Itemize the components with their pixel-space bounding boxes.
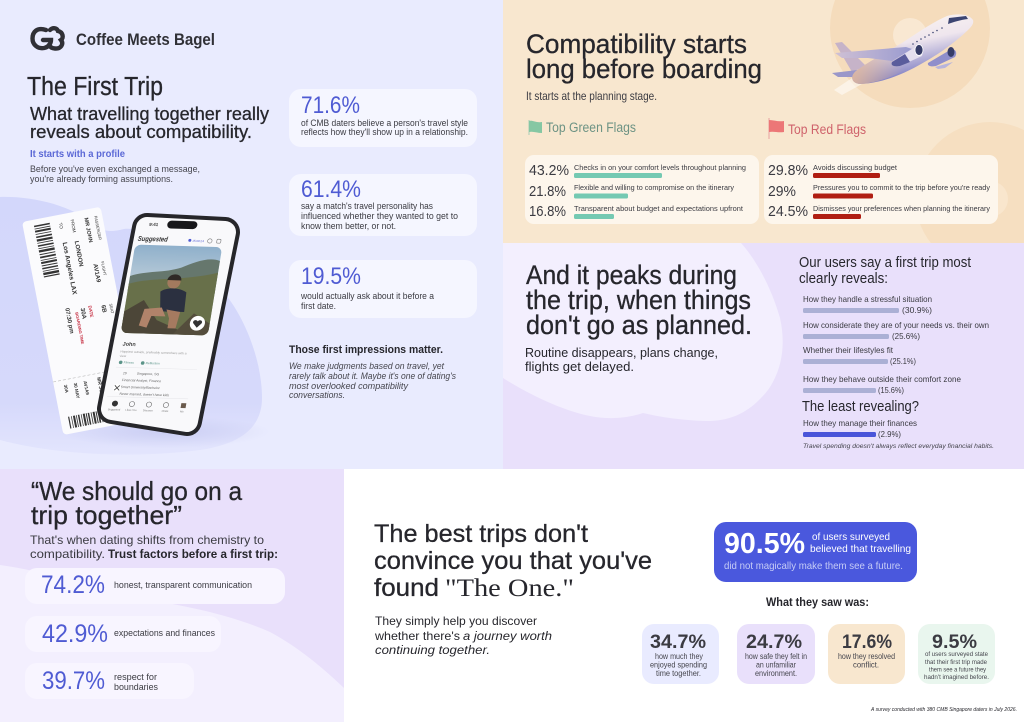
bar chart: what a first trip reveals: (25.1%) bbox=[890, 356, 916, 366]
text block: That's when dating shifts from chemistry to bbox=[30, 533, 264, 547]
icon: phone showing a dating profile bbox=[105, 220, 226, 421]
logo: Coffee Meets Bagel bbox=[32, 28, 215, 49]
icon: phone showing a dating profile: John bbox=[122, 342, 136, 348]
stat card: 34.7%: 34.7% bbox=[650, 632, 706, 653]
callout: 90.5%: believed that travelling bbox=[810, 543, 911, 555]
text block: Trust factors before a first trip: bbox=[108, 547, 278, 561]
stat card: 61.4%: say a match's travel personality has bbox=[301, 201, 433, 211]
stat card: 24.7%: an unfamiliar bbox=[756, 660, 796, 670]
logo: Coffee Meets Bagel: Coffee Meets Bagel bbox=[76, 30, 215, 49]
tab bar: Suggested bbox=[107, 407, 121, 412]
text block: They simply help you discover bbox=[375, 614, 537, 628]
lead-in: it starts with a profile: you're already forming assumptions. bbox=[30, 174, 173, 185]
ticket text: PASSENGER bbox=[93, 215, 103, 241]
text block: first impressions: Those first impressions matter. bbox=[289, 344, 443, 356]
callout: 90.5% bbox=[714, 522, 917, 582]
stat card: 17.6% bbox=[828, 624, 905, 684]
barcode bbox=[34, 223, 60, 278]
stat card: 24.7%: how safe they felt in bbox=[745, 652, 807, 661]
note: Travel spending doesn't always reflect everyday financial habits. bbox=[803, 443, 994, 450]
heading: found bbox=[374, 574, 439, 602]
callout: 90.5%: 90.5% bbox=[724, 528, 805, 560]
ticket text: BOARDING TIME bbox=[74, 312, 85, 345]
stat card: 34.7%: enjoyed spending bbox=[650, 660, 707, 670]
stat card: 74.2% bbox=[25, 568, 285, 604]
heading: first trip reveals bbox=[799, 255, 971, 287]
ticket text: LONDON bbox=[73, 241, 84, 267]
text block: first impressions: We make judgments based on travel, yet bbox=[289, 361, 444, 371]
heading bbox=[374, 520, 652, 602]
icon: green flag bbox=[529, 120, 542, 135]
ticket text: Los Angeles LAX bbox=[61, 242, 78, 296]
heading bbox=[526, 29, 762, 84]
bar chart: what a first trip reveals: How considerate they are of your needs vs. their own bbox=[803, 320, 989, 330]
panel: red flags: 29.8% bbox=[768, 162, 808, 179]
stat card: 71.6% bbox=[289, 89, 477, 147]
stat card: 74.2%: honest, transparent communication bbox=[114, 580, 252, 590]
ticket text: AV1A9 bbox=[83, 380, 90, 396]
stat card: 19.5%: first date. bbox=[301, 301, 336, 311]
ticket text: 6B bbox=[99, 305, 107, 314]
stat card: 9.5%: them see a future they bbox=[929, 666, 987, 674]
stat card: 42.9%: 42.9% bbox=[42, 620, 108, 648]
lead-in: it starts with a profile bbox=[30, 148, 200, 185]
text block: compatibility. bbox=[30, 547, 105, 561]
stat card: 17.6%: conflict. bbox=[853, 660, 879, 670]
bar chart: what a first trip reveals: How they behave outside their comfort zone bbox=[803, 374, 961, 384]
bar chart: what a first trip reveals: (25.6%) bbox=[892, 331, 920, 341]
icon: logo mark bbox=[32, 28, 63, 49]
stat card: 24.7%: 24.7% bbox=[746, 632, 802, 653]
text block: flights get delayed. bbox=[525, 360, 634, 374]
subheading: It starts at the planning stage. bbox=[526, 89, 657, 103]
bar chart: what a first trip reveals: How they handle a stressful situation bbox=[803, 294, 932, 304]
tab bar: Discover bbox=[143, 408, 153, 413]
panel: compatibility starts long before boarding bbox=[503, 0, 1024, 272]
heading: what they saw: What they saw was: bbox=[766, 597, 869, 609]
ticket text: AV1A9 bbox=[91, 263, 101, 284]
icon: boarding pass bbox=[22, 207, 142, 435]
panel: green flags: 16.8% bbox=[529, 203, 566, 220]
text block: first impressions: conversations. bbox=[289, 390, 345, 400]
heading: don't go as planned. bbox=[526, 310, 752, 340]
stat card: 71.6%: of CMB daters believe a person's travel style bbox=[301, 118, 468, 128]
text block: continuing together. bbox=[375, 643, 490, 657]
icon: phone showing a dating profile: 15:08:24 bbox=[192, 239, 205, 243]
text block: first impressions: most overlooked compatibility bbox=[289, 381, 408, 391]
heading: The best trips don't bbox=[374, 520, 588, 548]
text block bbox=[374, 614, 552, 657]
heading: Compatibility starts bbox=[526, 29, 747, 59]
lead-in: it starts with a profile: Before you've even exchanged a message, bbox=[30, 164, 200, 175]
icon: phone showing a dating profile: Never married, doesn't have kids bbox=[119, 392, 170, 397]
ticket text: FROM bbox=[69, 219, 77, 233]
text block: a journey worth bbox=[463, 629, 552, 643]
panel: the first trip bbox=[0, 0, 503, 469]
panel: green flags: Flexible and willing to compromise on the itinerary bbox=[574, 183, 734, 192]
text block bbox=[525, 346, 718, 374]
panel: red flags: Dismisses your preferences when planning the itinerary bbox=[813, 204, 990, 213]
stat card: 42.9%: expectations and finances bbox=[114, 628, 215, 638]
soft shadow under phone and ticket bbox=[60, 416, 270, 448]
stat card: 9.5% bbox=[918, 624, 995, 684]
stat card: 24.7% bbox=[737, 624, 815, 684]
background blob bbox=[0, 197, 262, 455]
ticket text: SEAT bbox=[108, 303, 115, 315]
bar chart: what a first trip reveals: Whether their lifestyles fit bbox=[803, 345, 894, 355]
heading bbox=[526, 260, 752, 340]
ticket text: DATE bbox=[87, 305, 94, 318]
bar: finances: How they manage their finances bbox=[803, 418, 917, 428]
icon: phone showing a dating profile: Happiest outside, preferably somewhere with a bbox=[120, 350, 187, 355]
stat card: 39.7%: 39.7% bbox=[42, 667, 105, 695]
stat card: 19.5%: 19.5% bbox=[301, 263, 361, 290]
heading: long before boarding bbox=[526, 54, 762, 84]
heading bbox=[31, 476, 243, 530]
icon: phone showing a dating profile: 29 bbox=[123, 371, 127, 375]
stat card: 9.5%: of users surveyed state bbox=[925, 651, 988, 658]
panel: red flags: Pressures you to commit to the trip before you're ready bbox=[813, 183, 990, 192]
stat card: 17.6%: how they resolved bbox=[838, 652, 895, 661]
icon: phone showing a dating profile: Suggested bbox=[137, 236, 169, 244]
bar: finances bbox=[803, 418, 917, 439]
icon: phone showing a dating profile: view bbox=[119, 354, 127, 358]
ticket text: 07:30 pm bbox=[63, 308, 74, 334]
photo bbox=[121, 245, 222, 335]
panel: green flags: Checks in on your comfort levels throughout planning bbox=[574, 163, 746, 172]
icon: phone showing a dating profile: 9:41 bbox=[149, 222, 159, 227]
stat card: 61.4%: influenced whether they wanted to get to bbox=[301, 211, 458, 221]
heading: “We should go on a bbox=[31, 476, 243, 506]
heading: the trip, when things bbox=[526, 285, 751, 315]
panel: the best trips bbox=[374, 520, 1017, 713]
text block: first impressions: rarely talk about it. Maybe it's one of dating's bbox=[289, 371, 456, 381]
text block: whether there's bbox=[374, 629, 460, 643]
stat card: 39.7%: boundaries bbox=[114, 682, 158, 692]
panel: it peaks during the trip bbox=[503, 243, 1024, 469]
stat card: 9.5%: that their first trip made bbox=[925, 659, 987, 666]
text block: Routine disappears, plans change, bbox=[525, 346, 718, 360]
stat card: 61.4%: know them better, or not. bbox=[301, 221, 396, 231]
subtitle: reveals about compatibility. bbox=[30, 121, 252, 142]
stat card: 71.6%: 71.6% bbox=[301, 92, 360, 119]
heading: trip together” bbox=[31, 500, 182, 530]
callout: 90.5%: did not magically make them see a future. bbox=[724, 560, 903, 572]
panel: we should go on a trip together bbox=[0, 469, 344, 722]
icon: phone showing a dating profile: Financial Analyst, Finance bbox=[121, 378, 162, 383]
tab bar: Me bbox=[180, 409, 185, 413]
subtitle bbox=[30, 103, 270, 142]
stat card: 71.6%: reflects how they'll show up in a relationship. bbox=[301, 127, 468, 137]
stat card: 24.7%: environment. bbox=[755, 669, 797, 678]
icon: phone showing a dating profile: Reflection bbox=[145, 361, 160, 365]
stat card: 19.5% bbox=[289, 260, 477, 318]
callout: 90.5%: of users surveyed bbox=[812, 531, 890, 543]
panel: red flags: 29% bbox=[768, 183, 796, 200]
stat card: 19.5%: would actually ask about it before a bbox=[300, 291, 434, 301]
ticket text: TO bbox=[58, 222, 64, 230]
panel: red flags: Avoids discussing budget bbox=[813, 163, 897, 172]
icon: red flag bbox=[769, 118, 784, 139]
ticket text: FLIGHT bbox=[100, 261, 108, 276]
tab bar: Chats bbox=[161, 409, 169, 413]
heading: top green flags: Top Green Flags bbox=[546, 120, 636, 135]
ticket text bbox=[32, 214, 133, 407]
title: The First Trip bbox=[27, 73, 163, 101]
stat card: 9.5%: 9.5% bbox=[932, 632, 977, 653]
tab bar bbox=[107, 400, 186, 414]
ticket text: MR JOHN bbox=[82, 217, 93, 243]
icon: airplane bbox=[832, 14, 973, 95]
bar chart: what a first trip reveals: (15.6%) bbox=[878, 385, 904, 395]
ticket text: 30A bbox=[63, 384, 70, 394]
panel: green flags: 43.2% bbox=[529, 162, 569, 179]
heading: "The One." bbox=[445, 575, 574, 602]
stat card: 9.5%: hadn't imagined before. bbox=[924, 674, 989, 681]
icon: phone showing a dating profile: Smart University/Bachelor bbox=[120, 385, 161, 390]
heading: first trip reveals: Our users say a first trip most bbox=[799, 255, 971, 271]
stat card: 34.7% bbox=[642, 624, 719, 684]
heading: the least revealing: The least revealing? bbox=[802, 399, 919, 415]
stat card: 34.7%: how much they bbox=[655, 652, 703, 661]
heading: first trip reveals: clearly reveals: bbox=[799, 271, 888, 287]
panel: red flags: 24.5% bbox=[768, 203, 808, 220]
heading: And it peaks during bbox=[526, 260, 737, 290]
ticket text: 30 MAY bbox=[73, 382, 81, 399]
panel: red flags bbox=[764, 155, 998, 224]
bar: finances: (2.9%) bbox=[878, 429, 901, 439]
stat card: 42.9% bbox=[25, 616, 221, 652]
stub barcode bbox=[68, 410, 103, 429]
ticket text: MR JOHN bbox=[95, 377, 105, 401]
stat card: 17.6%: 17.6% bbox=[842, 632, 892, 653]
heading: top red flags: Top Red Flags bbox=[788, 122, 866, 137]
text block: first impressions bbox=[289, 344, 456, 400]
bar chart: what a first trip reveals: (30.9%) bbox=[902, 305, 932, 315]
stat card: 39.7% bbox=[25, 663, 194, 699]
icon: phone showing a dating profile: Fitness bbox=[123, 360, 135, 365]
bar chart: what a first trip reveals bbox=[803, 294, 989, 395]
heading: convince you that you've bbox=[374, 547, 652, 575]
tab bar: Likes You bbox=[125, 408, 137, 412]
stat card: 61.4% bbox=[289, 174, 477, 236]
ticket text: 30A bbox=[79, 308, 87, 320]
panel: green flags: 21.8% bbox=[529, 183, 566, 200]
panel: green flags: Transparent about budget and expectations upfront bbox=[574, 204, 743, 213]
subtitle: What travelling together really bbox=[30, 103, 270, 124]
stat card: 61.4%: 61.4% bbox=[301, 176, 361, 203]
icon: phone showing a dating profile: Singapore, SG bbox=[137, 372, 160, 376]
panel: green flags bbox=[525, 155, 759, 224]
stat card: 74.2%: 74.2% bbox=[41, 571, 105, 599]
pass button bbox=[112, 384, 122, 392]
stat card: 34.7%: time together. bbox=[656, 669, 701, 678]
text block bbox=[30, 533, 278, 561]
stat card: 39.7%: respect for bbox=[114, 672, 157, 682]
lead-in: it starts with a profile: It starts with a profile bbox=[30, 148, 125, 160]
